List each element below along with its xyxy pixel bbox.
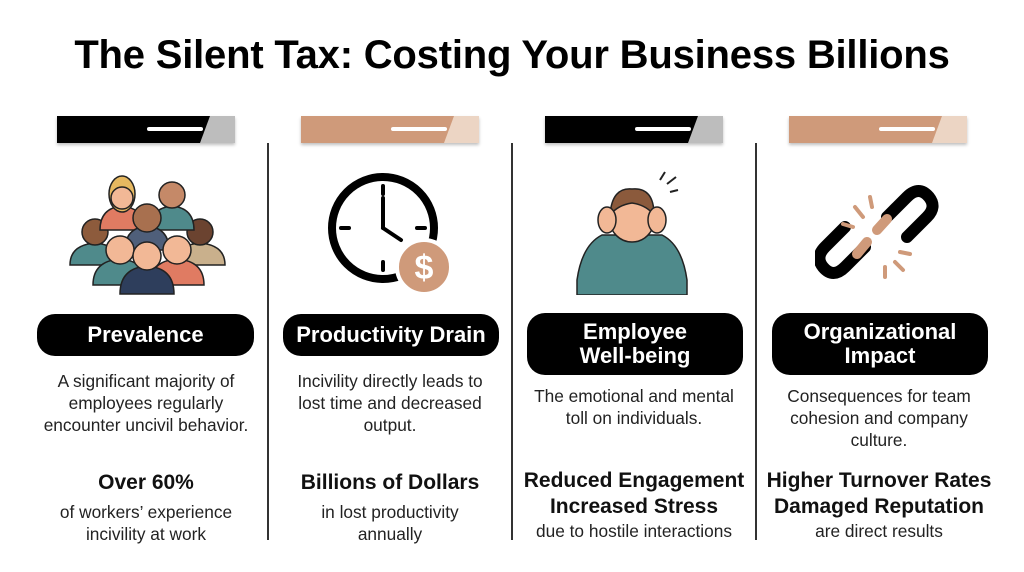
pill: Employee Well-being: Employee (583, 319, 687, 344)
text: column 3: toll on individuals. (566, 408, 702, 428)
text: column 3 (524, 386, 744, 541)
pill: Organizational Impact (772, 313, 988, 375)
pill: Organizational Impact: Organizational (804, 319, 956, 344)
icon: clock with dollar: $ (415, 249, 434, 287)
text: column 1: Over 60% (98, 471, 194, 494)
title: The Silent Tax: Costing Your Business Billions (74, 33, 950, 77)
text: column 3: Reduced Engagement (524, 469, 744, 492)
bar: column 2 (301, 116, 479, 143)
bar: column 4 (789, 116, 967, 143)
text: column 4: culture. (851, 430, 907, 450)
pill: Productivity Drain (283, 314, 499, 356)
text: column 1: employees regularly (69, 393, 223, 413)
text: column 4 (767, 386, 991, 541)
pill: Prevalence: Prevalence (87, 322, 204, 347)
text: column 2: in lost productivity (321, 502, 459, 522)
icon: broken chain (815, 185, 939, 279)
text: column 2: Incivility directly leads to (297, 371, 483, 391)
bar: column 1 (57, 116, 235, 143)
icon: stressed person (576, 172, 688, 295)
text: column 4: Consequences for team (787, 386, 971, 406)
bar: column 3 (545, 116, 723, 143)
text: column 4: Higher Turnover Rates (767, 469, 991, 492)
pill: Employee Well-being: Well-being (580, 343, 690, 368)
text: column 3: The emotional and mental (534, 386, 734, 406)
text: column 1: incivility at work (86, 524, 206, 544)
text: column 4: Damaged Reputation (774, 495, 984, 518)
text: column 4: cohesion and company (790, 408, 968, 428)
text: column 2: annually (358, 524, 422, 544)
icon: clock with dollar (328, 173, 449, 292)
text: column 1: A significant majority of (58, 371, 234, 391)
pill: Employee Well-being (527, 313, 743, 375)
pill: Productivity Drain: Productivity Drain (296, 322, 486, 347)
icon: group of people (69, 175, 226, 295)
text: column 1: encounter uncivil behavior. (44, 415, 248, 435)
text: column 3: Increased Stress (550, 495, 718, 518)
text: column 4: are direct results (815, 521, 943, 541)
text: column 1 (44, 371, 248, 544)
pill: Organizational Impact: Impact (845, 343, 915, 368)
text: column 1: of workers’ experience (60, 502, 232, 522)
text: column 2: output. (364, 415, 416, 435)
text: column 2: Billions of Dollars (301, 471, 479, 494)
pill: Prevalence (37, 314, 254, 356)
text: column 2 (297, 371, 483, 544)
text: column 2: lost time and decreased (298, 393, 482, 413)
text: column 3: due to hostile interactions (536, 521, 732, 541)
